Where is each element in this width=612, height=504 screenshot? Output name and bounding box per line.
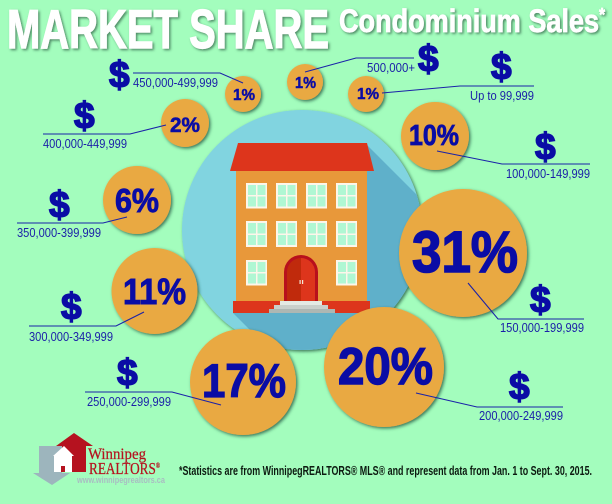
logo: Winnipeg Realtors — [33, 433, 166, 485]
bubble: 6% 350,000-399,999 — [17, 166, 171, 240]
bubble: 6% 350,000-399,999: $ — [49, 184, 70, 225]
bubble: 10% 100,000-149,999: $ — [535, 126, 556, 167]
bubble: 20% 200,000-249,999 — [324, 307, 563, 427]
bubble: 2% 400,000-449,999: 400,000-449,999 — [43, 137, 127, 151]
bubble: 2% 400,000-449,999: $ — [74, 95, 95, 136]
bubble: 20% 200,000-249,999: 200,000-249,999 — [479, 409, 563, 423]
bubble: 1% 500,000+ — [287, 38, 439, 100]
bubble: 1% 450,000-499,999: $ — [109, 54, 130, 95]
bubble: 1% 450,000-499,999: 450,000-499,999 — [133, 76, 218, 90]
logo word: Winnipeg: Winnipeg — [88, 446, 146, 463]
building body — [236, 171, 367, 302]
bubble: 31% 150,000-199,999 — [399, 189, 584, 335]
icon: white house — [53, 446, 74, 472]
roof — [230, 143, 374, 171]
windows — [246, 183, 357, 286]
bubble: 1% Up to 99,999 — [348, 46, 534, 112]
icon: house door — [61, 466, 65, 472]
bubble: 31% 150,000-199,999: $ — [530, 279, 551, 320]
bubble: 11% 300,000-349,999: 11% — [123, 271, 186, 312]
logo word: REALTORS: ® — [156, 462, 161, 470]
bubble: 1% 450,000-499,999 — [109, 54, 261, 112]
bubble: 11% 300,000-349,999: $ — [61, 286, 82, 327]
bubble: 31% 150,000-199,999: 150,000-199,999 — [500, 321, 584, 335]
bubble: 20% 200,000-249,999: $ — [509, 366, 530, 407]
bubble: 17% 250,000-299,999: 17% — [202, 354, 286, 407]
subtitle: * — [599, 5, 605, 25]
bubble: 6% 350,000-399,999: 6% — [115, 182, 159, 219]
central illustration: condominium building — [182, 110, 430, 360]
bubble: 10% 100,000-149,999: 10% — [409, 120, 459, 152]
bubble: 17% 250,000-299,999: $ — [117, 352, 138, 393]
bubble: 10% 100,000-149,999: 100,000-149,999 — [506, 167, 590, 181]
logo word: REALTORS: REALTORS — [89, 459, 175, 478]
bubble: 17% 250,000-299,999: 250,000-299,999 — [87, 395, 171, 409]
bubble: 17% 250,000-299,999 — [85, 329, 296, 435]
long shadow — [233, 145, 430, 360]
bubble: 2% 400,000-449,999 — [43, 95, 209, 151]
icon: red up arrow — [56, 433, 93, 472]
blue circle — [182, 110, 422, 350]
bubble: 1% Up to 99,999: $ — [491, 46, 512, 87]
bubble: 11% 300,000-349,999: 300,000-349,999 — [29, 330, 113, 344]
bubble: 1% 500,000+: 1% — [295, 75, 316, 92]
bubble: 31% 150,000-199,999: 31% — [412, 220, 518, 285]
door — [284, 255, 318, 302]
logo url: www.winnipegrealtors.ca — [76, 475, 166, 485]
bubble: 1% 500,000+: 500,000+ — [367, 61, 415, 75]
bubble: 11% 300,000-349,999 — [29, 248, 198, 344]
bubble: 6% 350,000-399,999: 350,000-399,999 — [17, 226, 101, 240]
bubble: 1% 500,000+: $ — [418, 38, 439, 79]
icon: grey down arrow — [33, 446, 70, 485]
bubble: 2% 400,000-449,999: 2% — [170, 114, 200, 137]
bubble: 1% Up to 99,999: 1% — [357, 86, 379, 103]
bubble: 20% 200,000-249,999: 20% — [338, 338, 433, 396]
base — [233, 301, 370, 313]
bubble: 1% 450,000-499,999: 1% — [233, 87, 255, 104]
bubble: 10% 100,000-149,999 — [401, 102, 590, 181]
steps — [269, 301, 335, 313]
bubble: 1% Up to 99,999: Up to 99,999 — [470, 89, 534, 103]
